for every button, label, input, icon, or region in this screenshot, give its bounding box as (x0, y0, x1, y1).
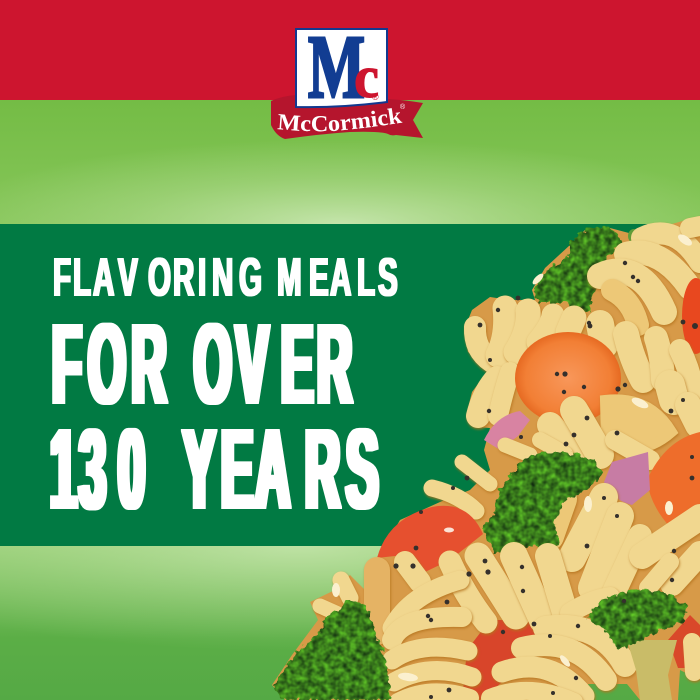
headline line 3: 130 YEARS (50, 407, 378, 533)
upper green glow (0, 100, 700, 224)
dark green headline panel (0, 224, 700, 546)
small broccoli leaf (628, 229, 640, 243)
right tomato (682, 278, 700, 354)
ribbon registered mark: ® (400, 103, 406, 111)
right carrot (647, 432, 700, 527)
logo letter M: M (308, 18, 365, 117)
lower green band (0, 546, 700, 700)
onion top left (484, 411, 530, 450)
fusilli fingers (320, 556, 566, 632)
left fusilli fingers (475, 308, 694, 416)
main spiral fusilli (392, 580, 472, 700)
bottom right broccoli floret (587, 590, 690, 650)
upper left small pasta (432, 445, 530, 511)
McCormick logo (271, 18, 423, 139)
food base silhouette (272, 216, 700, 700)
bottom carrot (462, 620, 543, 700)
upper right fusilli (600, 226, 700, 325)
headline text (50, 248, 398, 533)
pasta salad photo illustration (272, 216, 700, 700)
logo letter c: c (354, 44, 379, 110)
middle broccoli (482, 451, 602, 553)
poppy seeds (393, 261, 698, 699)
tomato highlight (444, 528, 454, 532)
bottom right red backing (668, 615, 700, 668)
middle onion (604, 452, 650, 505)
main carrot slice (515, 332, 621, 424)
red header band (0, 0, 700, 100)
lower left tomato (377, 506, 483, 572)
ribbon curve guide (277, 122, 406, 131)
bottom right broccoli stem (627, 640, 677, 700)
bottom left broccoli (273, 600, 390, 700)
headline line 1: FLAVORING MEALS (53, 248, 398, 308)
pasta beside middle broccoli (549, 497, 640, 592)
middle pasta pieces (540, 385, 698, 460)
logo ribbon (271, 95, 423, 139)
upper green band (0, 100, 700, 224)
ribbon wordmark: McCormick (277, 108, 402, 132)
headline line 2: FOR OVER (52, 302, 352, 428)
logo registered mark: ® (372, 92, 379, 102)
top broccoli (532, 227, 623, 313)
sesame seeds (332, 232, 694, 682)
lower green glow (0, 546, 700, 700)
logo square (296, 29, 387, 107)
bottom right spiral fusilli (490, 597, 694, 700)
right side pasta (642, 517, 700, 588)
